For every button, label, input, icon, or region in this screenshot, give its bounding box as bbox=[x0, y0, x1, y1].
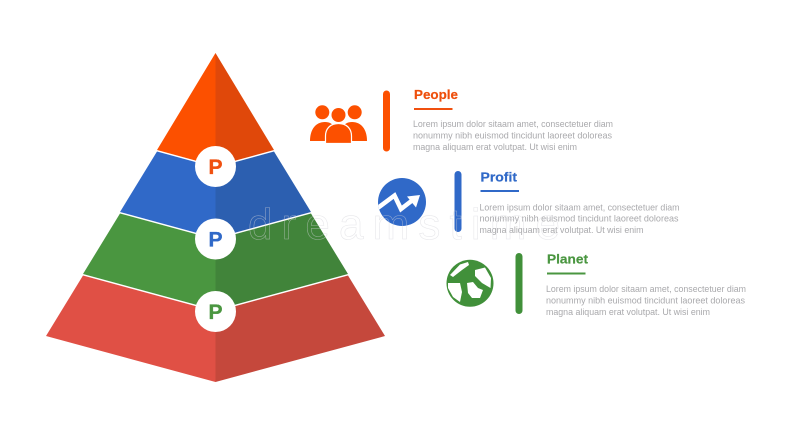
underline: People bbox=[414, 108, 452, 110]
accent bar: people bbox=[383, 90, 390, 152]
badge: blue P bbox=[195, 218, 236, 260]
badge: orange P: P bbox=[208, 156, 223, 179]
text block: Profit: nonummy nibh euismod tincidunt laoreet doloreas bbox=[480, 214, 679, 224]
text block: Profit: magna aliquam erat volutpat. Ut wisi enim bbox=[480, 225, 644, 235]
pyramid tier: red bbox=[46, 276, 385, 382]
heading: Planet: Planet bbox=[547, 252, 589, 266]
badge: green P bbox=[195, 291, 236, 332]
accent bar: profit bbox=[454, 171, 462, 232]
icon: profit chart arrow bbox=[377, 178, 426, 226]
heading: Profit: Profit bbox=[480, 170, 518, 184]
text block: People: Lorem ipsum dolor sitaam amet, consectetuer diam bbox=[413, 119, 613, 129]
heading: People: People bbox=[414, 87, 458, 102]
pyramid tier: orange top bbox=[157, 53, 274, 166]
text block: Planet: nonummy nibh euismod tincidunt laoreet doloreas bbox=[546, 296, 745, 306]
text block: Planet: magna aliquam erat volutpat. Ut wisi enim bbox=[546, 307, 710, 317]
pyramid tier: green bbox=[83, 214, 348, 310]
text block: People: magna aliquam erat volutpat. Ut wisi enim bbox=[413, 142, 577, 152]
underline: Planet bbox=[547, 272, 586, 274]
text block: Profit: Lorem ipsum dolor sitaam amet, consectetuer diam bbox=[480, 202, 680, 212]
pyramid tier: blue bbox=[120, 152, 311, 238]
watermark: dreamstime bbox=[248, 200, 560, 249]
icon: people group bbox=[310, 105, 367, 144]
badge: green P: P bbox=[208, 301, 223, 324]
text block: People: nonummy nibh euismod tincidunt laoreet doloreas bbox=[413, 130, 612, 140]
icon: planet globe bbox=[446, 260, 494, 307]
accent bar: planet bbox=[516, 253, 522, 314]
underline: Profit bbox=[480, 190, 519, 192]
badge: blue P: P bbox=[208, 228, 223, 252]
badge: orange P bbox=[195, 146, 236, 187]
pyramid bbox=[46, 53, 385, 382]
text block: Planet: Lorem ipsum dolor sitaam amet, consectetuer diam bbox=[546, 284, 746, 294]
